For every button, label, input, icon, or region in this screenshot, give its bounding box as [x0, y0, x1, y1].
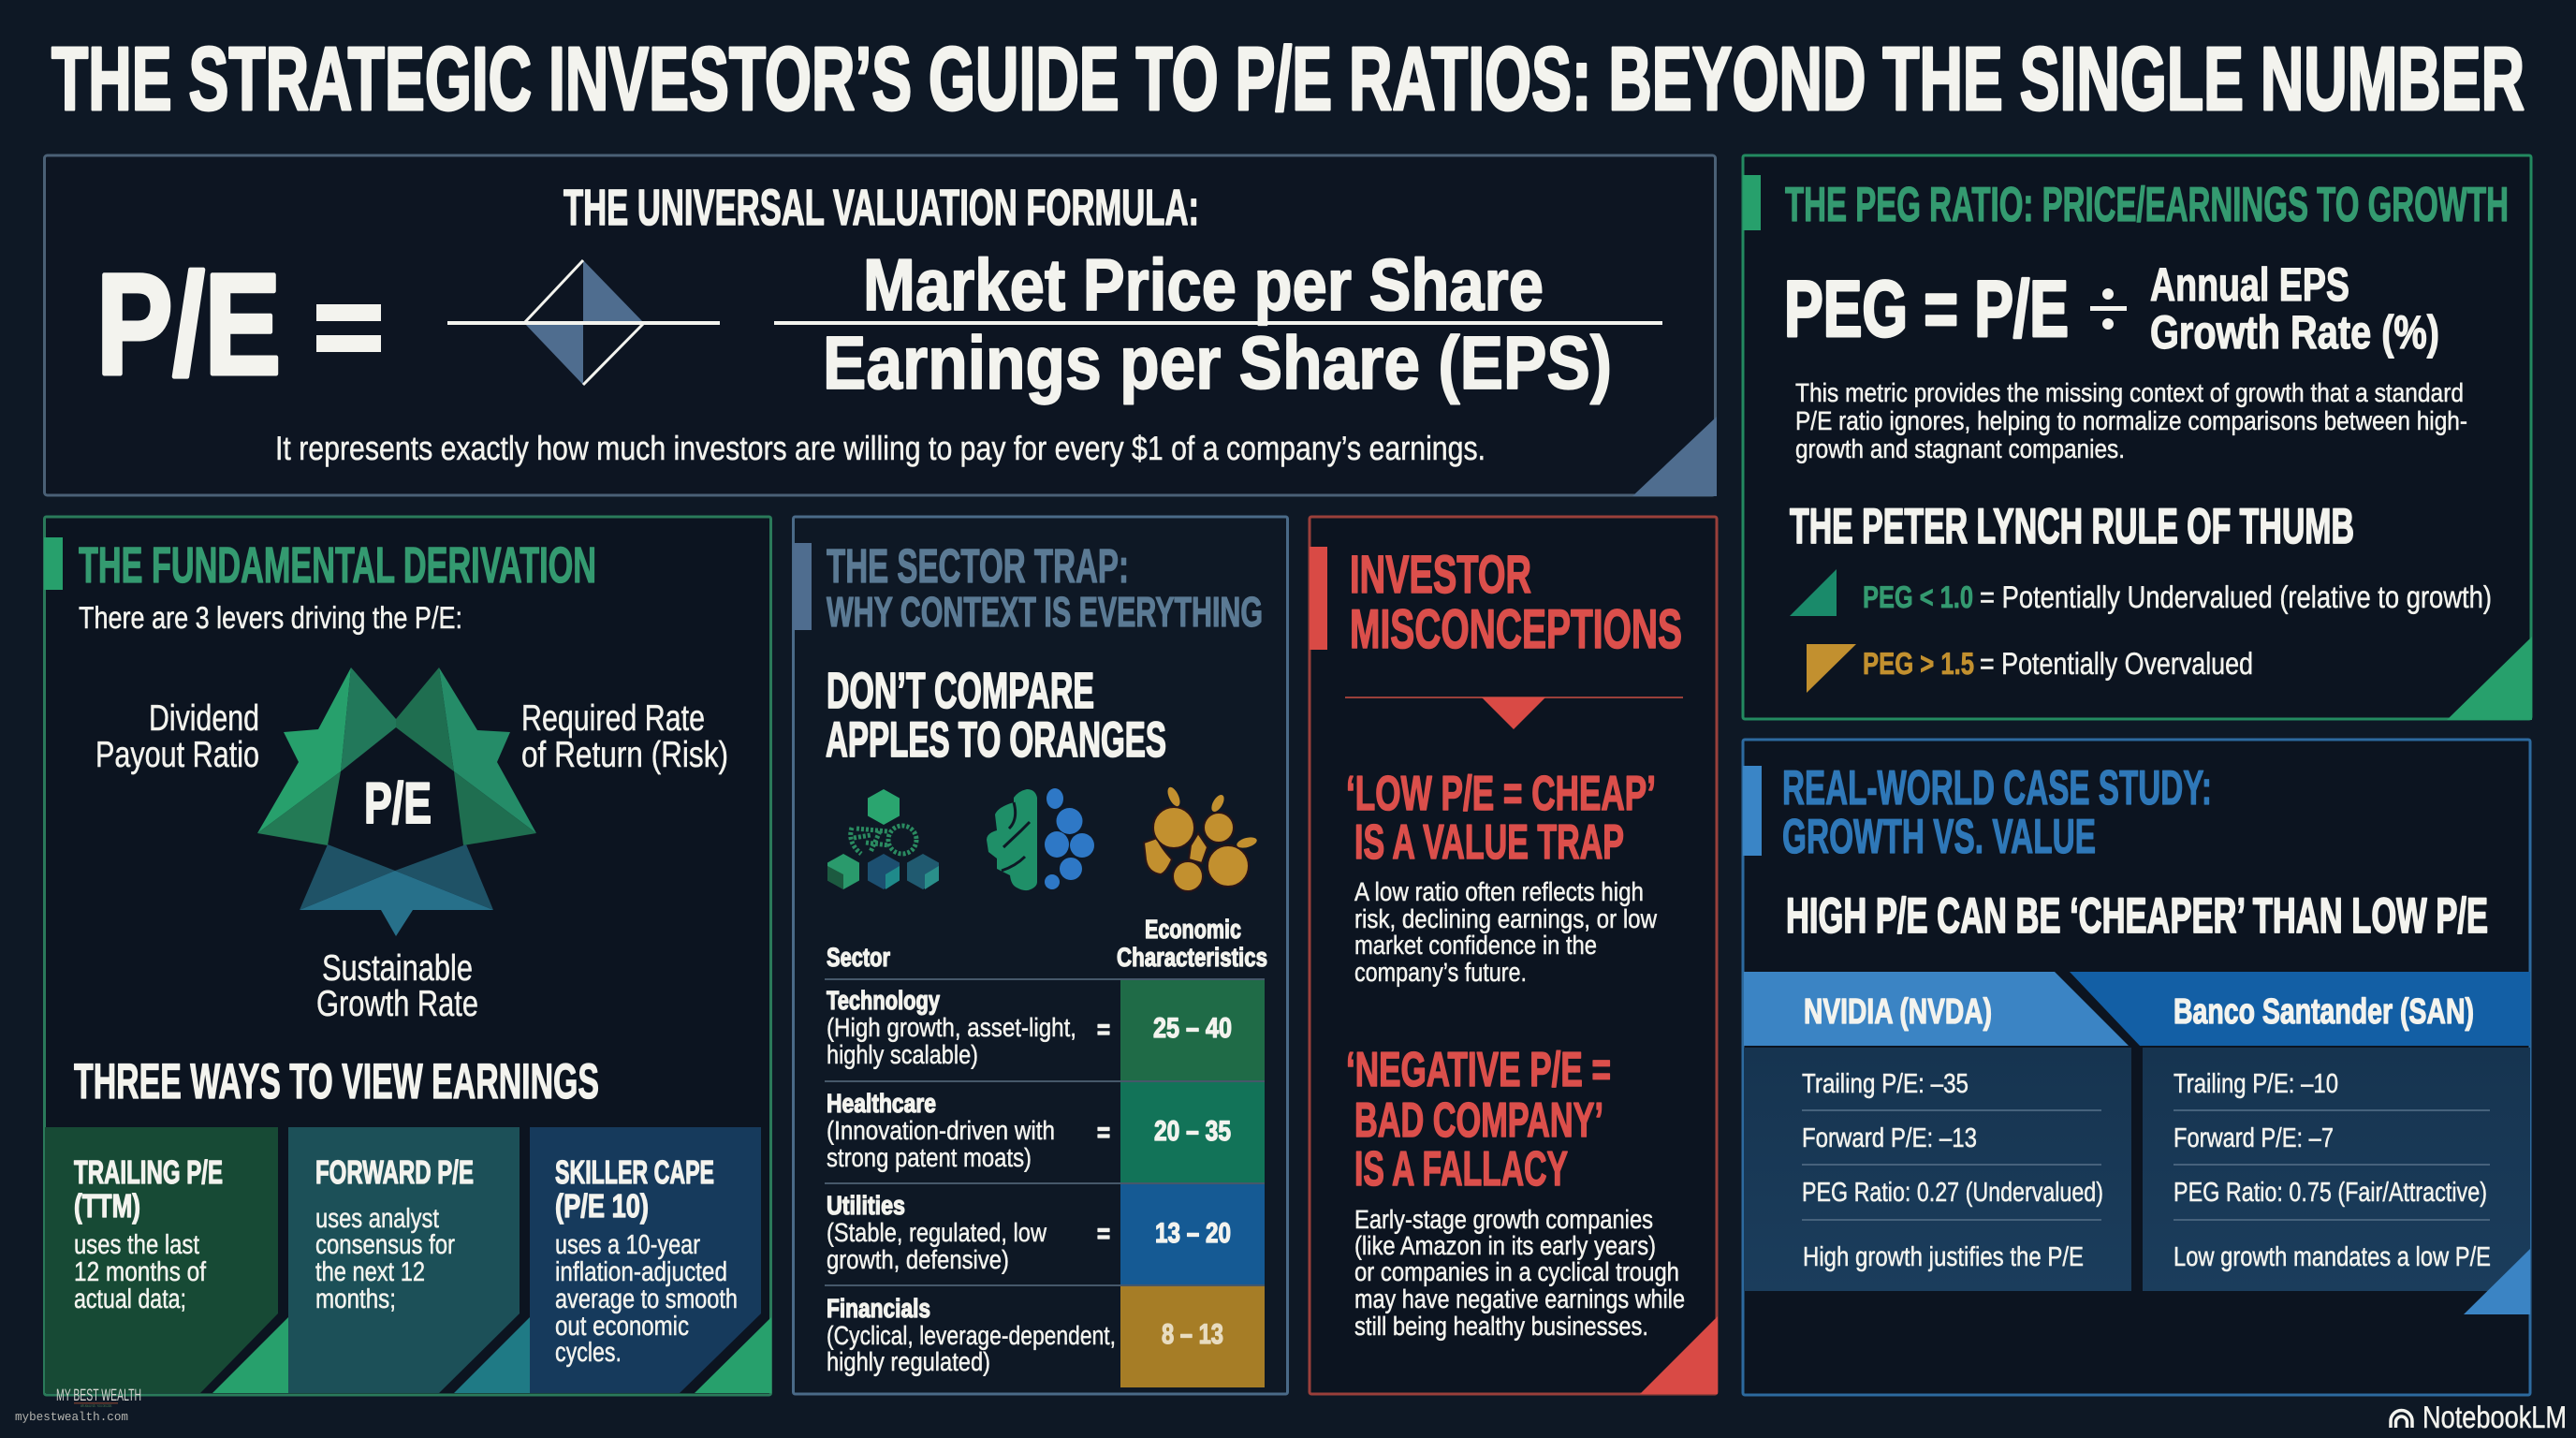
card: forward P/E: the next 12	[315, 1257, 425, 1287]
table header: Economic	[1145, 915, 1241, 944]
diagram: three levers star: P/E	[364, 771, 432, 836]
icon: split diamond	[447, 260, 720, 385]
row: utilities: 13 – 20	[1155, 1218, 1231, 1249]
heading: universal valuation formula: THE UNIVERSAL VALUATION FORMULA:	[564, 180, 1199, 236]
watermark: my best wealth	[15, 1386, 141, 1424]
panel: investor misconceptions	[1310, 517, 1718, 1394]
formula: market price over earnings: Earnings per Share (EPS)	[823, 321, 1612, 404]
row: financials: 8 – 13	[1162, 1319, 1223, 1350]
icon: financials fruit	[1144, 785, 1258, 891]
icon: technology cubes and network	[827, 789, 939, 889]
heading: three ways to view earnings: THREE WAYS TO VIEW EARNINGS	[74, 1054, 599, 1109]
diagram: three levers star	[257, 668, 536, 936]
heading: case study	[1782, 761, 2212, 864]
heading: case study: REAL-WORLD CASE STUDY:	[1782, 761, 2212, 815]
rule: overvalued: = Potentially Overvalued	[1980, 646, 2253, 681]
row: healthcare: (Innovation-driven with	[827, 1116, 1055, 1145]
heading: case study: GROWTH VS. VALUE	[1782, 810, 2096, 864]
card: forward P/E: uses analyst	[315, 1204, 439, 1234]
label: required rate of return: of Return (Risk)	[521, 735, 728, 775]
corner accent	[2447, 637, 2532, 720]
row: utilities: =	[1097, 1219, 1110, 1248]
card: trailing P/E: (TTM)	[74, 1188, 140, 1225]
misconception: low P/E: company’s future.	[1354, 958, 1527, 987]
row: financials: highly regulated)	[827, 1347, 990, 1376]
misconception: negative P/E	[1346, 1043, 1685, 1341]
card: forward P/E: months;	[315, 1284, 396, 1314]
panel: PEG ratio	[1743, 155, 2532, 720]
subheading: apples to oranges: APPLES TO ORANGES	[826, 712, 1166, 768]
row: healthcare	[827, 1089, 1231, 1172]
card: Shiller CAPE: uses a 10-year	[555, 1230, 700, 1260]
row: utilities	[827, 1191, 1231, 1274]
column: NVIDIA: NVIDIA (NVDA)	[1804, 992, 1992, 1032]
column: NVIDIA: PEG Ratio: 0.27 (Undervalued)	[1802, 1178, 2103, 1208]
column: NVIDIA	[1744, 972, 2131, 1291]
formula: PEG: Annual EPS	[2150, 258, 2349, 311]
PEG description: This metric provides the missing context of growth that a standard	[1795, 378, 2464, 407]
misconception: low P/E: market confidence in the	[1354, 931, 1597, 960]
card: Shiller CAPE: (P/E 10)	[555, 1188, 649, 1225]
misconception: low P/E: IS A VALUE TRAP	[1354, 815, 1624, 870]
heading: sector trap	[827, 539, 1263, 636]
intro text: There are 3 levers driving the P/E:	[79, 600, 462, 635]
heading: sector trap: WHY CONTEXT IS EVERYTHING	[827, 588, 1263, 636]
misconception: low P/E: A low ratio often reflects high	[1354, 877, 1644, 906]
rule: undervalued	[1790, 569, 2492, 616]
row: technology: highly scalable)	[827, 1040, 978, 1069]
misconception: negative P/E: may have negative earnings while	[1354, 1284, 1685, 1313]
misconception: low P/E: risk, declining earnings, or low	[1354, 904, 1658, 933]
card: forward P/E: consensus for	[315, 1230, 455, 1260]
subheading: apples to oranges: DON’T COMPARE	[827, 663, 1094, 719]
row: financials: (Cyclical, leverage-dependent,	[827, 1321, 1116, 1350]
heading: sector trap: THE SECTOR TRAP:	[827, 539, 1129, 593]
row: technology: 25 – 40	[1153, 1013, 1232, 1044]
row: technology	[827, 986, 1232, 1069]
label: sustainable growth rate: Sustainable	[322, 948, 473, 989]
column: Banco Santander: Banco Santander (SAN)	[2174, 992, 2474, 1032]
row: healthcare: =	[1097, 1118, 1110, 1147]
formula: market price over earnings	[774, 243, 1662, 404]
watermark: my best wealth: WE ANALYZE. YOU DECIDE.	[80, 1403, 112, 1408]
label: sustainable growth rate: Growth Rate	[316, 984, 478, 1024]
misconception: negative P/E: still being healthy businesses.	[1354, 1312, 1648, 1341]
card: Shiller CAPE: out economic	[555, 1312, 689, 1342]
column: Banco Santander: PEG Ratio: 0.75 (Fair/Attractive)	[2174, 1178, 2487, 1208]
corner accent	[2464, 1249, 2530, 1314]
table: sector P/E ranges	[825, 915, 1267, 1387]
watermark: my best wealth: MY BEST WEALTH	[56, 1386, 141, 1404]
card: trailing P/E: uses the last	[74, 1230, 199, 1260]
icon: healthcare brain	[987, 788, 1094, 890]
card: trailing P/E	[45, 1127, 288, 1393]
PEG description	[1795, 378, 2467, 463]
misconception: low P/E: ‘LOW P/E = CHEAP’	[1346, 767, 1656, 821]
card: Shiller CAPE: cycles.	[555, 1338, 622, 1368]
formula: PEG: PEG = P/E	[1784, 265, 2069, 354]
label: sustainable growth rate	[316, 948, 478, 1024]
row: utilities: growth, defensive)	[827, 1245, 1009, 1274]
misconception: negative P/E: (like Amazon in its early years)	[1354, 1231, 1656, 1260]
corner accent	[1632, 417, 1717, 496]
column: NVIDIA: High growth justifies the P/E	[1803, 1242, 2084, 1272]
formula: P/E equals: P/E	[96, 244, 281, 404]
column: NVIDIA: Trailing P/E: –35	[1802, 1069, 1969, 1099]
label: dividend payout ratio	[95, 698, 259, 775]
heading: investor misconceptions: INVESTOR	[1350, 545, 1531, 605]
card: Shiller CAPE: average to smooth	[555, 1284, 738, 1314]
label: dividend payout ratio: Payout Ratio	[95, 735, 259, 775]
misconception: low P/E	[1346, 767, 1658, 987]
panel: universal valuation formula	[45, 155, 1717, 496]
rule: overvalued: PEG > 1.5	[1863, 646, 1974, 681]
heading: fundamental derivation: THE FUNDAMENTAL DERIVATION	[79, 537, 596, 594]
misconception: negative P/E: Early-stage growth companies	[1354, 1205, 1653, 1234]
column: NVIDIA: Forward P/E: –13	[1802, 1123, 1977, 1153]
panel: sector trap	[793, 517, 1288, 1394]
PEG description: growth and stagnant companies.	[1795, 434, 2125, 463]
watermark: my best wealth: mybestwealth.com	[15, 1410, 128, 1424]
divider with arrow	[1345, 697, 1683, 729]
rule: undervalued: PEG < 1.0	[1863, 580, 1973, 614]
rule: overvalued	[1807, 644, 2253, 693]
column: Banco Santander: Low growth mandates a low P/E	[2174, 1242, 2491, 1272]
row: utilities: (Stable, regulated, low	[827, 1218, 1047, 1247]
PEG description: P/E ratio ignores, helping to normalize comparisons between high-	[1795, 406, 2467, 435]
heading: investor misconceptions	[1350, 545, 1682, 660]
card: Shiller CAPE	[530, 1127, 771, 1393]
card: trailing P/E: 12 months of	[74, 1257, 207, 1287]
panel: fundamental derivation	[44, 517, 771, 1395]
formula: market price over earnings: Market Price per Share	[863, 243, 1544, 326]
panel: case study	[1743, 740, 2530, 1395]
label: required rate of return: Required Rate	[521, 698, 705, 739]
card: trailing P/E: actual data;	[74, 1284, 186, 1314]
table header: Characteristics	[1117, 943, 1267, 972]
row: technology: =	[1097, 1015, 1110, 1044]
row: healthcare: strong patent moats)	[827, 1143, 1032, 1172]
table header	[827, 915, 1267, 972]
row: healthcare: Healthcare	[827, 1089, 936, 1118]
row: technology: (High growth, asset-light,	[827, 1013, 1076, 1042]
column: Banco Santander: Trailing P/E: –10	[2174, 1069, 2338, 1099]
row: utilities: Utilities	[827, 1191, 905, 1220]
row: financials	[827, 1294, 1223, 1376]
misconception: negative P/E: BAD COMPANY’	[1354, 1093, 1603, 1148]
column: Banco Santander: Forward P/E: –7	[2174, 1123, 2334, 1153]
card: forward P/E	[288, 1127, 530, 1393]
misconception: negative P/E: IS A FALLACY	[1354, 1142, 1568, 1196]
subheading: apples to oranges	[826, 663, 1166, 768]
label: required rate of return	[521, 698, 728, 775]
formula: PEG	[1784, 258, 2439, 359]
column: Banco Santander	[2070, 972, 2530, 1291]
card: Shiller CAPE: inflation-adjucted	[555, 1257, 727, 1287]
card: Shiller CAPE: SKILLER CAPE	[555, 1154, 714, 1191]
label: dividend payout ratio: Dividend	[149, 698, 259, 739]
row: financials: Financials	[827, 1294, 930, 1323]
formula: PEG: Growth Rate (%)	[2150, 306, 2439, 359]
row: technology: Technology	[827, 986, 940, 1015]
formula explanation: It represents exactly how much investors are willing to pay for every $1 of a company’s earnings.	[275, 429, 1486, 467]
misconception: negative P/E: ‘NEGATIVE P/E =	[1346, 1043, 1611, 1097]
card: trailing P/E: TRAILING P/E	[74, 1154, 223, 1191]
corner accent	[1640, 1316, 1718, 1394]
misconception: negative P/E: or companies in a cyclical trough	[1354, 1257, 1679, 1286]
heading: investor misconceptions: MISCONCEPTIONS	[1350, 598, 1682, 660]
card: forward P/E: FORWARD P/E	[315, 1154, 474, 1191]
row: healthcare: 20 – 35	[1154, 1116, 1231, 1147]
table header: Sector	[827, 943, 890, 972]
